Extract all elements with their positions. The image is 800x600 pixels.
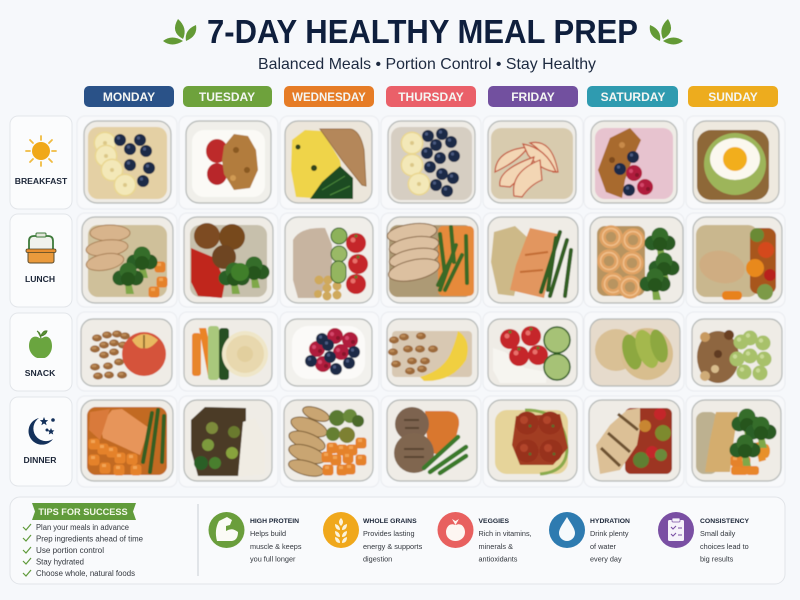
meal: veggie sticks and hummus bbox=[179, 312, 278, 391]
meal: mixed nuts and grapes bbox=[686, 312, 785, 391]
label text: BREAKFAST bbox=[15, 176, 68, 186]
meal: beef, broccoli and rice bbox=[179, 396, 278, 487]
icon: left leaves bbox=[163, 19, 196, 44]
benefit: consistency: Small daily bbox=[700, 529, 736, 538]
tips ribbon: TIPS FOR SUCCESS bbox=[38, 507, 128, 517]
meal: yogurt with mixed berries bbox=[280, 312, 379, 391]
meal: pink yogurt with granola and berries bbox=[584, 116, 684, 209]
day: wednesday: WEDNESDAY bbox=[292, 92, 366, 104]
row: dinner meals bbox=[77, 396, 785, 487]
benefit: consistency: CONSISTENCY bbox=[700, 518, 750, 525]
label text: SNACK bbox=[25, 368, 56, 378]
tips checklist: Use portion control bbox=[36, 546, 104, 555]
row label: snack bbox=[10, 313, 72, 391]
meal: turkey patties, sweet potato mash and beans bbox=[381, 396, 481, 487]
tips checklist: Choose whole, natural foods bbox=[36, 569, 135, 578]
day: sunday: SUNDAY bbox=[708, 90, 758, 104]
meal: grilled chicken, sprouts and sweet potato bbox=[280, 396, 379, 487]
icon: sun bbox=[26, 136, 56, 166]
day: tuesday bbox=[183, 86, 272, 107]
day: wednesday bbox=[284, 86, 374, 107]
icon: right leaves bbox=[650, 19, 683, 44]
day: monday bbox=[84, 86, 174, 107]
meal: yogurt with strawberries and granola bbox=[179, 116, 278, 209]
meal: shrimp, noodles and broccoli bbox=[584, 213, 684, 307]
meal: almonds and apple bbox=[77, 312, 177, 391]
benefit: hydration: of water bbox=[590, 542, 617, 551]
meal: meatballs, peppers, broccoli and rice bbox=[179, 213, 278, 307]
day: saturday: SATURDAY bbox=[601, 90, 665, 104]
day: friday: FRIDAY bbox=[511, 90, 555, 104]
meal: grilled chicken and roasted vegetables bbox=[584, 396, 684, 487]
meal: tomatoes, feta and cucumber bbox=[483, 312, 583, 391]
benefit: whole grains bbox=[323, 512, 423, 564]
benefit: veggies: minerals & bbox=[478, 542, 513, 551]
day: thursday: THURSDAY bbox=[398, 90, 464, 104]
day: friday bbox=[488, 86, 578, 107]
benefit: consistency: choices lead to bbox=[700, 542, 749, 551]
meal: salmon, sweet potato and green beans bbox=[77, 396, 177, 487]
icon: moon and stars bbox=[29, 417, 55, 445]
tips ribbon bbox=[32, 503, 136, 520]
panel: tips and benefits bbox=[10, 497, 785, 584]
meal: rice cakes and avocado bbox=[584, 312, 684, 391]
meal: salmon, rice, broccoli and carrots bbox=[686, 396, 785, 487]
row label: lunch bbox=[10, 214, 72, 307]
day header pills bbox=[84, 86, 778, 107]
meal: oats with apple slices bbox=[483, 116, 583, 209]
day: tuesday: TUESDAY bbox=[199, 90, 255, 104]
benefit: high protein bbox=[208, 512, 302, 564]
label text: LUNCH bbox=[25, 274, 55, 284]
benefit: whole grains: digestion bbox=[363, 554, 392, 564]
title block bbox=[163, 13, 683, 73]
tips checklist: Plan your meals in advance bbox=[36, 523, 130, 532]
icon: lunch box bbox=[26, 233, 56, 263]
benefit: veggies: Rich in vitamins, bbox=[478, 529, 532, 538]
day: thursday bbox=[386, 86, 476, 107]
icon: apple bbox=[29, 331, 52, 358]
tips checklist: Stay hydrated bbox=[36, 558, 84, 566]
benefit: hydration: HYDRATION bbox=[590, 518, 630, 525]
meal: rice, salmon and green beans bbox=[483, 213, 583, 307]
benefit: whole grains: WHOLE GRAINS bbox=[363, 518, 417, 525]
day: sunday bbox=[688, 86, 778, 107]
benefit: high protein: Helps build bbox=[250, 529, 286, 538]
benefit: consistency bbox=[658, 512, 750, 564]
benefit: high protein: muscle & keeps bbox=[250, 542, 302, 551]
meal: sliced chicken, quinoa and green beans bbox=[381, 213, 481, 307]
row label: breakfast bbox=[10, 116, 72, 209]
benefit: consistency: big results bbox=[700, 554, 734, 564]
benefit: hydration bbox=[549, 512, 630, 564]
benefit: hydration: every day bbox=[590, 554, 622, 564]
benefit: hydration: Drink plenty bbox=[590, 529, 629, 538]
meal: spaghetti and meatballs bbox=[483, 396, 583, 487]
row: snack meals bbox=[77, 312, 785, 391]
meal: chicken, rice, broccoli and carrots bbox=[77, 213, 177, 307]
meal: chia with banana and blueberries bbox=[381, 116, 481, 209]
row label: dinner bbox=[10, 397, 72, 486]
meal: almonds and banana bbox=[381, 312, 481, 391]
benefit: veggies: VEGGIES bbox=[478, 518, 510, 525]
meal: scrambled eggs, toast and spinach bbox=[280, 116, 379, 209]
row: breakfast meals bbox=[77, 116, 785, 209]
day: monday: MONDAY bbox=[103, 90, 155, 104]
benefit: veggies bbox=[438, 512, 532, 564]
row: lunch meals bbox=[77, 213, 785, 307]
tips checklist: Prep ingredients ahead of time bbox=[36, 534, 144, 544]
label text: DINNER bbox=[24, 455, 57, 465]
meal: avocado toast with egg bbox=[686, 116, 785, 209]
benefit: high protein: HIGH PROTEIN bbox=[250, 518, 299, 525]
meal: grains, cucumber, tomato and chickpeas bbox=[280, 213, 379, 307]
benefit: whole grains: energy & supports bbox=[363, 542, 423, 551]
heading: 7-DAY HEALTHY MEAL PREP bbox=[207, 13, 638, 50]
benefit: whole grains: Provides lasting bbox=[363, 529, 415, 538]
meal: oatmeal with banana and blueberries bbox=[77, 116, 177, 209]
benefit: veggies: antioxidants bbox=[478, 554, 518, 564]
subtitle: Balanced Meals • Portion Control • Stay Healthy bbox=[258, 56, 596, 73]
tips checklist bbox=[23, 523, 144, 578]
meal: chicken, rice and roasted vegetables bbox=[686, 213, 785, 307]
day: saturday bbox=[587, 86, 678, 107]
benefit: high protein: you full longer bbox=[250, 554, 296, 564]
